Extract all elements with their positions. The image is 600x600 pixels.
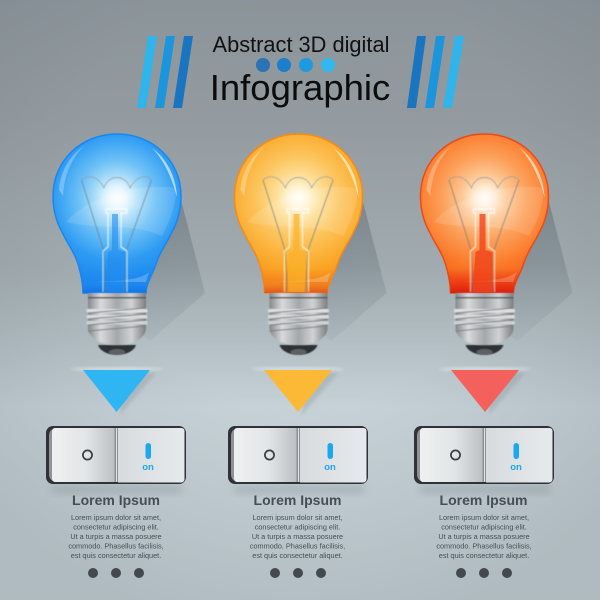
column heading: Lorem Ipsum xyxy=(254,492,341,508)
body text: Lorem ipsum dolor sit amet, xyxy=(252,513,343,522)
body text: est quis consectetur aliquet. xyxy=(252,551,343,560)
body text xyxy=(250,513,345,560)
pointer triangle xyxy=(252,367,344,415)
body text xyxy=(436,513,532,560)
toggle switch: on xyxy=(324,462,336,473)
body text: commodo. Phasellus facilisis, xyxy=(68,542,164,550)
column: orange xyxy=(228,367,368,578)
heading: abstract: Abstract 3D digital xyxy=(213,32,389,57)
body text: Lorem ipsum dolor sit amet, xyxy=(439,513,529,522)
column heading: Lorem Ipsum xyxy=(440,492,527,508)
title block xyxy=(137,32,464,108)
toggle switch: on xyxy=(142,462,154,473)
body text: commodo. Phasellus facilisis, xyxy=(436,542,532,550)
body text: est quis consectetur aliquet. xyxy=(71,551,161,560)
bulb: orange xyxy=(234,134,386,355)
left stripes xyxy=(137,36,193,108)
bulb: red xyxy=(420,134,572,355)
pagination dots xyxy=(456,568,512,578)
bulb: blue xyxy=(53,134,205,355)
pagination dots xyxy=(270,568,326,578)
body text: Lorem ipsum dolor sit amet, xyxy=(71,513,161,522)
body text: consectetur adipiscing elit. xyxy=(255,522,340,532)
column: red xyxy=(414,367,554,578)
toggle switch xyxy=(228,426,368,493)
heading: infographic: Infographic xyxy=(210,67,390,108)
body text: consectetur adipiscing elit. xyxy=(73,522,159,532)
body text xyxy=(68,513,164,560)
pagination dots xyxy=(88,568,144,578)
toggle switch xyxy=(414,426,554,493)
body text: consectetur adipiscing elit. xyxy=(441,522,527,532)
right stripes xyxy=(407,36,464,108)
body text: est quis consectetur aliquet. xyxy=(439,551,529,560)
pointer triangle xyxy=(70,367,162,415)
body text: commodo. Phasellus facilisis, xyxy=(250,542,345,550)
column: blue xyxy=(46,367,186,578)
toggle switch xyxy=(46,426,186,493)
pointer triangle xyxy=(439,367,531,415)
body text: Ut a turpis a massa posuere xyxy=(70,532,162,541)
body text: Ut a turpis a massa posuere xyxy=(252,532,343,541)
column heading: Lorem Ipsum xyxy=(72,492,160,508)
body text: Ut a turpis a massa posuere xyxy=(438,532,530,541)
title dots xyxy=(256,58,335,72)
toggle switch: on xyxy=(510,462,522,473)
